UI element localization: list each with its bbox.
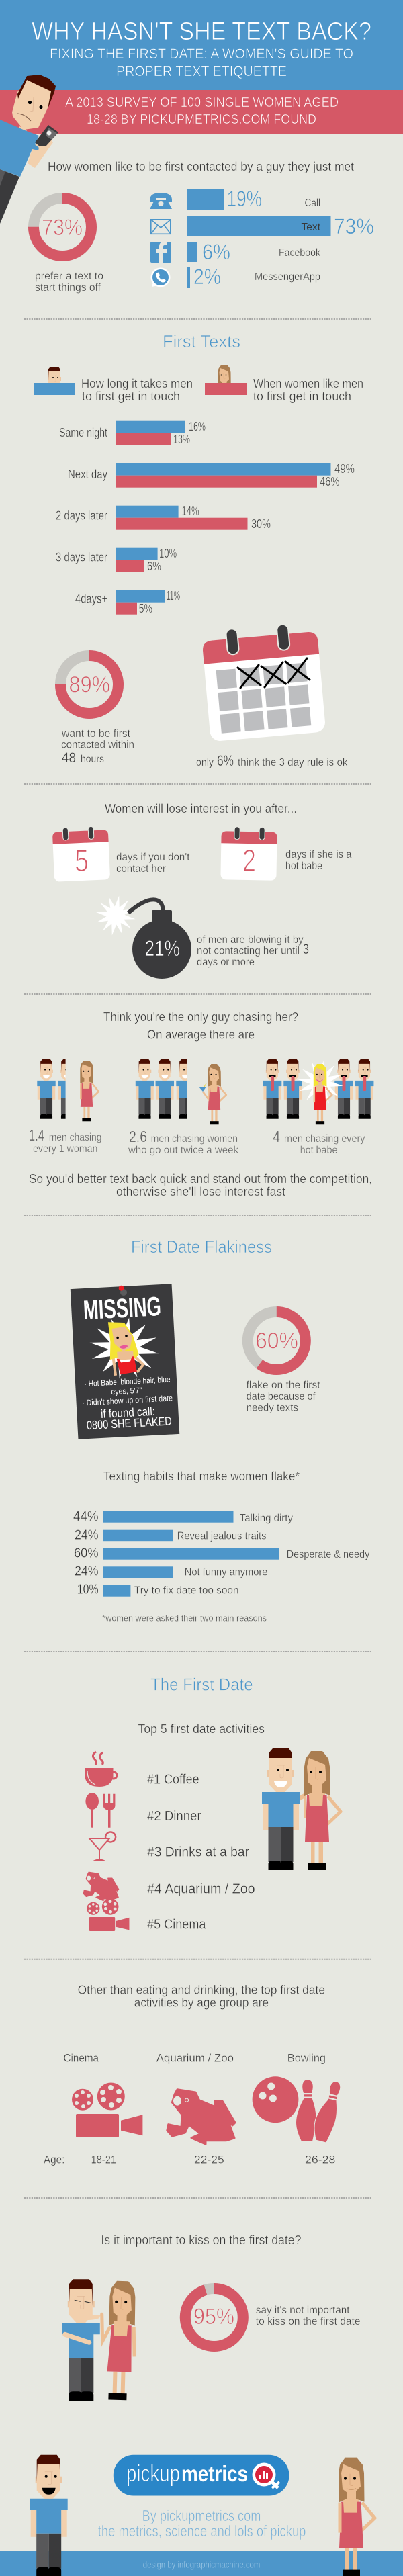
3 day rule caption — [196, 752, 348, 769]
calendar: 2 days: 2 — [242, 843, 256, 878]
question heading: How women like to be first contacted by a guy they just met — [48, 160, 354, 173]
row: 2 days later: 30% — [251, 517, 271, 531]
section: how women like to be contacted — [34, 160, 374, 294]
caption: 1.4 men: 1.4 — [29, 1126, 44, 1144]
header banner — [0, 0, 403, 134]
footnote: *women were asked their two main reasons — [102, 1613, 267, 1624]
text: dinner: #2 Dinner — [147, 1809, 202, 1824]
donut 95% caption: to kiss on the first date — [256, 2316, 361, 2327]
heading: only guy chasing: On average there are — [147, 1028, 255, 1042]
3 day rule caption: 6% — [217, 752, 234, 769]
donut caption: start things off — [35, 282, 101, 294]
activity: aquarium age 22-25: Aquarium / Zoo — [156, 2051, 234, 2064]
calendar: 5 days — [52, 826, 110, 882]
bar: messenger app 2%: MessengerApp — [255, 271, 320, 283]
heading: texting habits: Texting habits that make women flake* — [103, 1470, 300, 1483]
bar: talking dirty: 44% — [73, 1509, 99, 1524]
icon: mail — [151, 220, 171, 234]
figures: 4 men per hot babe — [263, 1058, 373, 1124]
caption: 4 men: men chasing every — [284, 1133, 365, 1145]
conclusion text: So you'd better text back quick and stand out from the competition, — [29, 1172, 372, 1186]
tagline: the metrics, science and lols of pickup — [98, 2522, 306, 2540]
conclusion text: otherwise she'll lose interest fast — [116, 1185, 285, 1198]
icon: bomb 21%: 21% — [145, 936, 180, 961]
logo: pickupmetrics: pickup — [126, 2460, 180, 2487]
bar: reveal jealous traits — [75, 1527, 266, 1542]
caption: 4 men — [273, 1128, 365, 1156]
donut 60% caption: flake on the first — [247, 1380, 320, 1391]
bar: text 73%: 73% — [334, 214, 374, 238]
caption: 4 men: hot babe — [300, 1145, 338, 1156]
caption: 2 days: days if she is a — [285, 849, 352, 860]
icon: camera small — [87, 1898, 129, 1931]
row: 3 days later: 10% — [159, 547, 177, 560]
credit: design by infographicmachine.com — [143, 2559, 260, 2570]
activity: bowling age 26-28: Bowling — [287, 2051, 326, 2064]
bar: try to fix date too soon — [77, 1582, 239, 1597]
heading: first texts: First Texts — [163, 331, 240, 351]
donut 89%: 89% — [69, 672, 110, 698]
text: drinks: #3 Drinks at a bar — [147, 1845, 249, 1859]
row: 2 days later: 2 days later — [56, 509, 107, 523]
donut 73%: 73% — [42, 215, 83, 240]
icon: bomb 21% — [92, 892, 191, 979]
heading: kiss question: Is it important to kiss on the first date? — [101, 2233, 301, 2247]
donut 95% caption: say it's not important — [256, 2305, 350, 2316]
bar: facebook 6%: 6% — [202, 240, 230, 264]
chart: texting habits — [73, 1509, 369, 1597]
kissing couple illustration — [62, 2279, 136, 2401]
couple illustration — [262, 1748, 341, 1870]
caption: 2 days — [285, 849, 352, 872]
heading: only guy chasing — [103, 1010, 298, 1042]
legend: men: How long it takes men — [81, 377, 193, 390]
heading: women lose interest: Women will lose interest in you after... — [105, 802, 297, 815]
donut 95%: 95% — [193, 2304, 234, 2329]
activity: cinema age 18-21: Cinema — [63, 2051, 99, 2064]
donut 89% caption: 48 — [62, 750, 76, 766]
figures: 2.6 men per woman — [136, 1059, 226, 1124]
subtitle line 2: PROPER TEXT ETIQUETTE — [116, 64, 287, 79]
legend: women — [205, 365, 363, 403]
row: same night: Same night — [59, 426, 107, 439]
donut 60% caption: needy texts — [247, 1403, 298, 1414]
icon: big calendar with crossed days — [202, 621, 326, 742]
missing poster: 0800 SHE FLAKED — [86, 1414, 172, 1432]
legend: women: to first get in touch — [253, 390, 351, 403]
missing poster: · Hot Babe, blonde hair, blue — [84, 1375, 171, 1388]
donut 89% caption: want to be first — [61, 728, 131, 740]
bar: desperate and needy: Desperate & needy — [287, 1549, 369, 1560]
text: aquarium: #4 Aquarium / Zoo — [147, 1881, 255, 1896]
3 day rule caption: only — [196, 757, 214, 768]
donut 95% — [185, 2289, 243, 2346]
bar: text 73% — [187, 214, 374, 238]
bomb caption: not contacting her until — [197, 946, 300, 957]
row: 2 days later — [56, 504, 271, 531]
3 day rule caption: think the 3 day rule is ok — [238, 757, 348, 768]
bar: desperate and needy — [74, 1546, 369, 1560]
footer woman — [339, 2458, 375, 2576]
missing poster: eyes, 5'7" — [111, 1386, 142, 1396]
bar: call 19%: 19% — [227, 187, 262, 211]
logo: pickupmetrics: metrics — [181, 2461, 248, 2486]
donut 89% caption: contacted within — [61, 740, 134, 751]
missing poster — [71, 1284, 179, 1439]
caption: 2 days: hot babe — [285, 860, 322, 872]
row: next day: 49% — [334, 462, 355, 476]
row: 4 days plus — [75, 589, 180, 615]
subtitle line 1: FIXING THE FIRST DATE: A WOMEN'S GUIDE TO — [50, 46, 353, 62]
donut 89% caption: hours — [81, 754, 104, 765]
legend: women: When women like men — [253, 377, 363, 390]
man with phone illustration — [0, 75, 58, 224]
heading: only guy chasing: Think you're the only guy chasing her? — [103, 1010, 298, 1024]
donut 73% — [34, 198, 91, 256]
footer bar — [0, 2551, 403, 2576]
row: 4 days plus: 5% — [139, 602, 152, 615]
missing poster: if found call: — [101, 1405, 155, 1421]
text: activities by age: activities by age group are — [134, 1996, 269, 2010]
text: activities by age — [78, 1983, 325, 2010]
row: same night: 13% — [173, 433, 190, 446]
bar: talking dirty — [73, 1509, 293, 1524]
missing poster: · Didn't show up on first date — [82, 1393, 173, 1407]
bar: messenger app 2% — [187, 265, 320, 289]
activity: bowling age 26-28: 26-28 — [305, 2153, 335, 2166]
caption: 2.6 men: who go out twice a week — [128, 1145, 239, 1156]
heading: the first date: The First Date — [150, 1675, 253, 1695]
caption: 4 men: 4 — [273, 1128, 280, 1145]
caption: 2.6 men: 2.6 — [129, 1128, 147, 1145]
text: activities by age: Other than eating and drinking, the top first date — [78, 1983, 325, 1996]
icon: frog small — [83, 1872, 119, 1900]
survey line 1: A 2013 SURVEY OF 100 SINGLE WOMEN AGED — [65, 95, 339, 110]
row: same night: 16% — [189, 420, 206, 433]
bar: reveal jealous traits: 24% — [75, 1527, 99, 1542]
row: next day: Next day — [68, 468, 107, 481]
missing poster: MISSING — [83, 1292, 162, 1325]
text: cinema: #5 Cinema — [147, 1918, 206, 1933]
tagline: By pickupmetrics.com — [142, 2507, 261, 2524]
row: next day: 46% — [320, 475, 340, 488]
caption: 5 days — [116, 852, 190, 875]
donut 89% — [60, 656, 118, 713]
bomb caption — [197, 934, 309, 968]
donut 95% caption — [256, 2305, 361, 2327]
donut 60% caption — [247, 1380, 320, 1414]
survey line 2: 18-28 BY PICKUPMETRICS.COM FOUND — [87, 112, 316, 127]
caption: 5 days: contact her — [116, 863, 167, 875]
row: next day — [68, 462, 355, 488]
bar: not funny anymore: Not funny anymore — [185, 1567, 267, 1579]
title: WHY HASN'T SHE TEXT BACK? — [32, 17, 371, 46]
footer man — [30, 2455, 68, 2576]
icon: cocktail — [89, 1832, 116, 1861]
calendar: 5 days: 5 — [75, 843, 89, 878]
icon: facebook — [150, 242, 171, 263]
bar: call 19%: Call — [305, 197, 320, 209]
subheading: top 5 activities: Top 5 first date activities — [138, 1722, 265, 1736]
donut 60%: 60% — [255, 1329, 298, 1354]
activity: bowling age 26-28 — [253, 2051, 345, 2166]
bar: text 73%: Text — [301, 222, 321, 233]
activity: aquarium age 22-25 — [156, 2051, 235, 2166]
icon: whatsapp — [150, 267, 171, 287]
row: same night — [59, 420, 206, 446]
heading: first date flakiness: First Date Flakiness — [131, 1237, 272, 1257]
row: 3 days later — [56, 547, 177, 573]
bar: messenger app 2%: 2% — [193, 265, 221, 289]
legend: men: to first get in touch — [82, 390, 180, 403]
bomb caption: 3 — [303, 942, 309, 957]
caption: 1.4 men: men chasing — [49, 1132, 102, 1143]
label: age: Age: — [44, 2153, 64, 2166]
text: coffee: #1 Coffee — [147, 1773, 199, 1787]
row: 4 days plus: 11% — [167, 589, 180, 603]
row: 4 days plus: 4days+ — [75, 592, 107, 606]
activity: aquarium age 22-25: 22-25 — [194, 2153, 224, 2166]
bar: try to fix date too soon: Try to fix date too soon — [134, 1585, 239, 1597]
icon: coffee cup — [85, 1752, 117, 1787]
caption: 1.4 men — [29, 1126, 102, 1155]
donut 60% caption: date because of — [247, 1391, 316, 1403]
bar: facebook 6%: Facebook — [279, 247, 321, 259]
row: 2 days later: 14% — [181, 504, 199, 518]
activity: cinema age 18-21 — [63, 2051, 142, 2166]
bar: talking dirty: Talking dirty — [240, 1513, 293, 1524]
tagline — [98, 2507, 306, 2540]
bomb caption: days or more — [197, 957, 255, 968]
bar: call 19% — [187, 187, 320, 211]
icon: telephone — [150, 193, 172, 209]
calendar: 2 days — [220, 826, 277, 881]
caption: 1.4 men: every 1 woman — [33, 1143, 97, 1155]
bar: desperate and needy: 60% — [74, 1546, 99, 1560]
bomb caption: of men are blowing it by — [197, 934, 304, 946]
conclusion text — [29, 1172, 372, 1198]
chart: first contact timing — [56, 420, 355, 615]
caption: 5 days: days if you don't — [116, 852, 190, 863]
bar: try to fix date too soon: 10% — [77, 1582, 99, 1597]
donut 60% — [248, 1312, 306, 1370]
icon: spoon and fork — [85, 1793, 115, 1828]
bar: facebook 6% — [187, 240, 321, 264]
activity: cinema age 18-21: 18-21 — [91, 2153, 116, 2166]
figures: 1.4 men per woman — [37, 1059, 99, 1121]
logo: pickupmetrics — [114, 2455, 289, 2496]
bar: not funny anymore — [75, 1564, 267, 1579]
donut caption: prefer a text to — [35, 271, 103, 282]
caption: 2.6 men — [128, 1128, 239, 1156]
bar: reveal jealous traits: Reveal jealous traits — [177, 1531, 266, 1542]
donut caption — [35, 271, 103, 294]
row: 3 days later: 6% — [147, 560, 161, 573]
donut 89% caption — [61, 728, 134, 766]
legend: men — [34, 367, 193, 403]
bar: not funny anymore: 24% — [75, 1564, 99, 1579]
row: 3 days later: 3 days later — [56, 551, 107, 564]
caption: 2.6 men: men chasing women — [151, 1133, 238, 1145]
